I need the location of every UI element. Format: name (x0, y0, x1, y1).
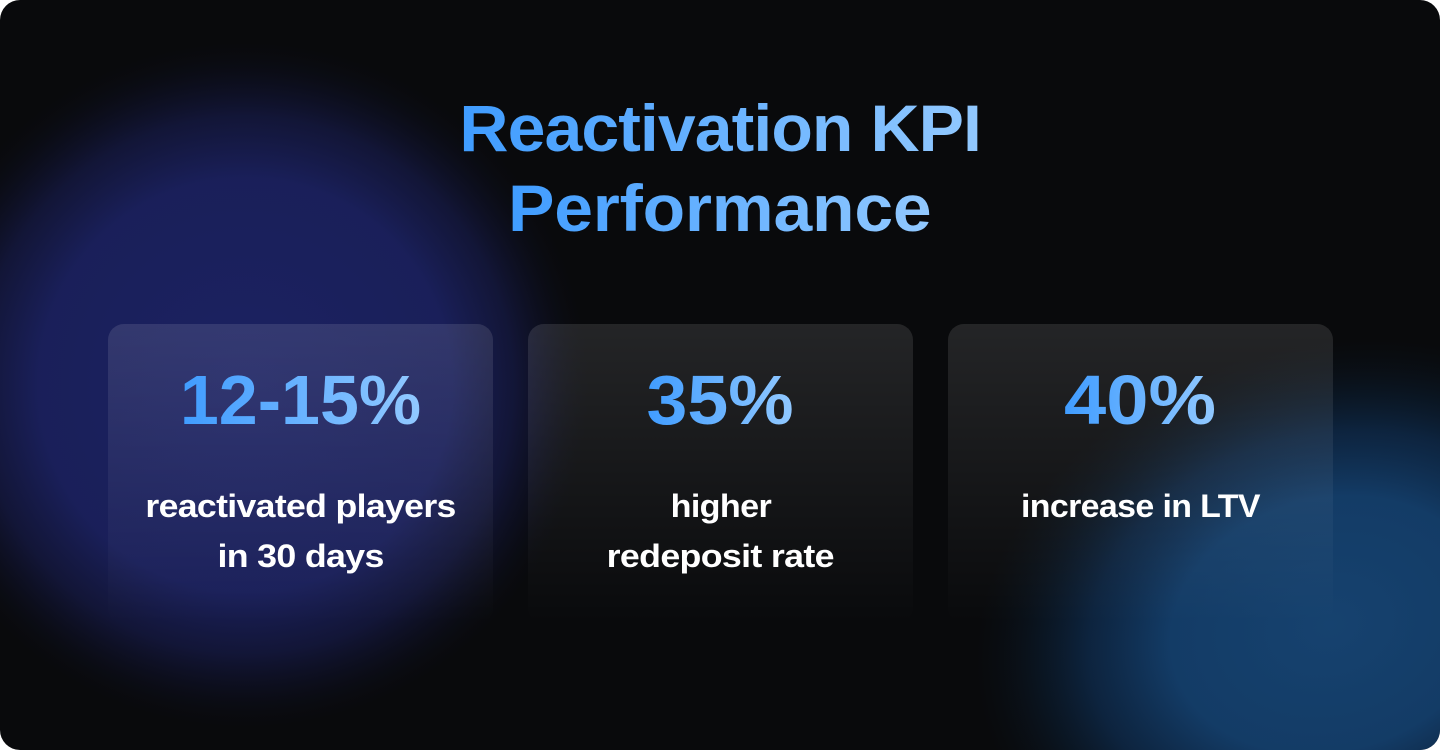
title: Performance (508, 171, 932, 245)
label: higher redeposit rate (607, 488, 834, 574)
label: reactivated players in 30 days (145, 488, 456, 574)
stat: 40%: 40% (1064, 361, 1217, 439)
label: higher redeposit rate: higher (670, 488, 771, 524)
label: reactivated players in 30 days: reactivated players (145, 488, 456, 524)
label: increase in LTV: increase in LTV (1021, 488, 1260, 524)
title: Reactivation KPI (459, 91, 981, 165)
panel: redeposit rate (528, 324, 913, 624)
panel: reactivated players (108, 324, 493, 624)
panel: LTV increase (948, 324, 1333, 624)
stat: 12-15%: 12-15% (180, 361, 421, 439)
label: reactivated players in 30 days: in 30 days (217, 538, 384, 574)
title (459, 91, 981, 245)
stat: 35%: 35% (647, 361, 794, 439)
label: higher redeposit rate: redeposit rate (607, 538, 834, 574)
